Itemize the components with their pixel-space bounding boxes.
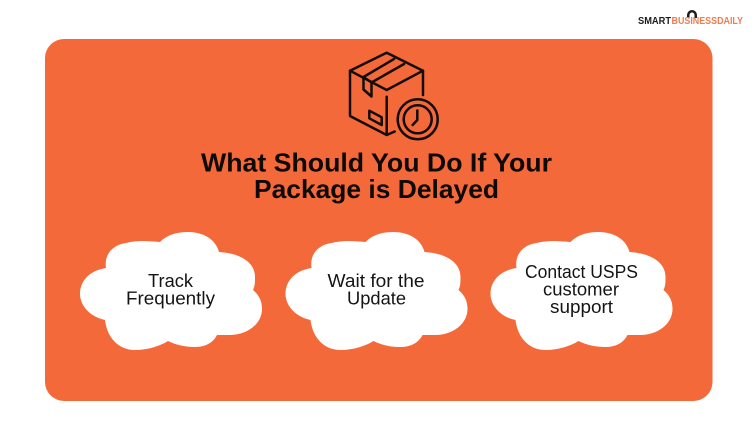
cloud: contact USPS customer support: support bbox=[550, 297, 613, 317]
cloud: wait for the update bbox=[286, 232, 468, 350]
cloud: track frequently bbox=[80, 232, 262, 350]
cloud: contact USPS customer support bbox=[490, 232, 672, 350]
cloud: wait for the update: Update bbox=[347, 288, 406, 308]
cloud: wait for the update: Wait for the bbox=[328, 271, 424, 291]
cloud: contact USPS customer support: customer bbox=[543, 280, 619, 300]
logo: Smart Business Daily bbox=[638, 10, 743, 27]
panel: orange background bbox=[45, 39, 712, 401]
cloud: contact USPS customer support: Contact USPS bbox=[525, 262, 638, 282]
cloud: track frequently: Frequently bbox=[126, 288, 215, 308]
logo: Smart Business Daily: BUSINESSDAILY bbox=[672, 16, 743, 27]
title: Package is Delayed bbox=[254, 174, 499, 204]
icon: delayed package with clock bbox=[350, 53, 438, 139]
title bbox=[201, 148, 552, 204]
cloud: track frequently: Track bbox=[148, 271, 194, 291]
title: What Should You Do If Your bbox=[201, 148, 552, 178]
logo: Smart Business Daily: SMART bbox=[638, 16, 671, 27]
